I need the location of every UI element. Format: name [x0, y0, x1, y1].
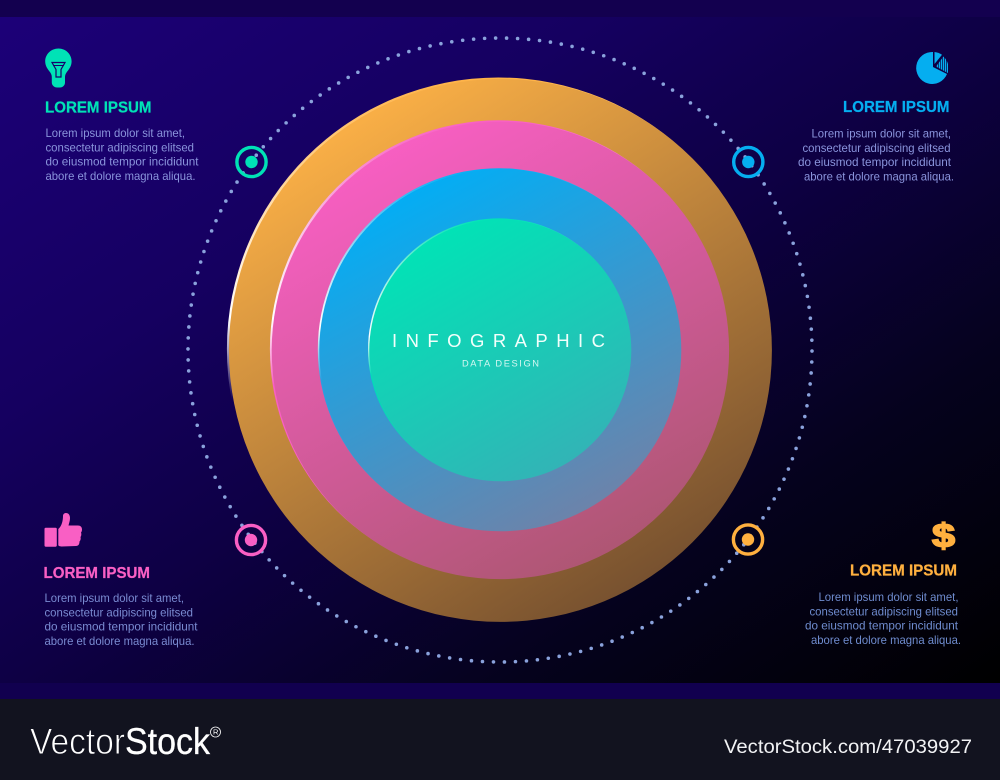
footer watermark: [30, 721, 972, 762]
heading: LOREM IPSUM: [843, 99, 950, 116]
centre subtitle: DATA DESIGN: [462, 358, 539, 368]
heading: LOREM IPSUM: [850, 562, 957, 580]
logo: Vector: [30, 721, 125, 762]
text block: Lorem ipsum dolor sit amet,: [812, 126, 951, 140]
text block: abore et dolore magna aliqua.: [804, 170, 954, 184]
text block: abore et dolore magna aliqua.: [44, 634, 194, 648]
text block: consectetur adipiscing elitsed: [44, 606, 193, 620]
image id: VectorStock.com/47039927: [724, 737, 972, 758]
panel: top right: [798, 52, 954, 184]
node: teal: [237, 147, 266, 177]
icon: dollar sign: $: [932, 517, 955, 554]
panel: top left: [45, 48, 199, 183]
panel: bottom right: [805, 517, 961, 647]
centre title: INFOGRAPHIC: [392, 330, 605, 351]
concentric circles: [227, 78, 772, 622]
text block: abore et dolore magna aliqua.: [811, 633, 961, 647]
text block: consectetur adipiscing elitsed: [46, 140, 194, 154]
text block: abore et dolore magna aliqua.: [46, 169, 196, 183]
text block: Lorem ipsum dolor sit amet,: [818, 590, 958, 604]
text block: do eiusmod tempor incididunt: [798, 155, 952, 169]
dotted orbit: [188, 38, 812, 662]
text block: do eiusmod tempor incididunt: [44, 620, 198, 634]
heading: LOREM IPSUM: [45, 100, 152, 116]
text block: [798, 126, 954, 184]
text block: do eiusmod tempor incididunt: [46, 154, 199, 168]
panel: bottom left: [44, 513, 198, 648]
text block: Lorem ipsum dolor sit amet,: [46, 126, 185, 140]
text block: consectetur adipiscing elitsed: [810, 604, 958, 618]
node: orange: [733, 525, 763, 554]
ring: teal centre: [368, 218, 631, 481]
text block: consectetur adipiscing elitsed: [802, 141, 950, 155]
text block: [44, 591, 198, 648]
logo: R: [213, 728, 219, 737]
icon: thumbs up: [44, 513, 82, 547]
ring: orange: [227, 78, 772, 622]
text block: [805, 590, 961, 647]
heading: LOREM IPSUM: [44, 565, 150, 582]
ring: blue: [318, 168, 681, 531]
text block: do eiusmod tempor incididunt: [805, 618, 959, 632]
icon: pie chart: [916, 52, 949, 84]
icon: light bulb: [45, 48, 72, 88]
logo: [30, 721, 220, 762]
text block: Lorem ipsum dolor sit amet,: [44, 591, 184, 605]
node: blue: [734, 147, 763, 177]
logo: Stock: [125, 721, 210, 762]
node: pink: [236, 525, 266, 555]
text block: [46, 126, 199, 183]
ring: pink: [270, 120, 729, 579]
